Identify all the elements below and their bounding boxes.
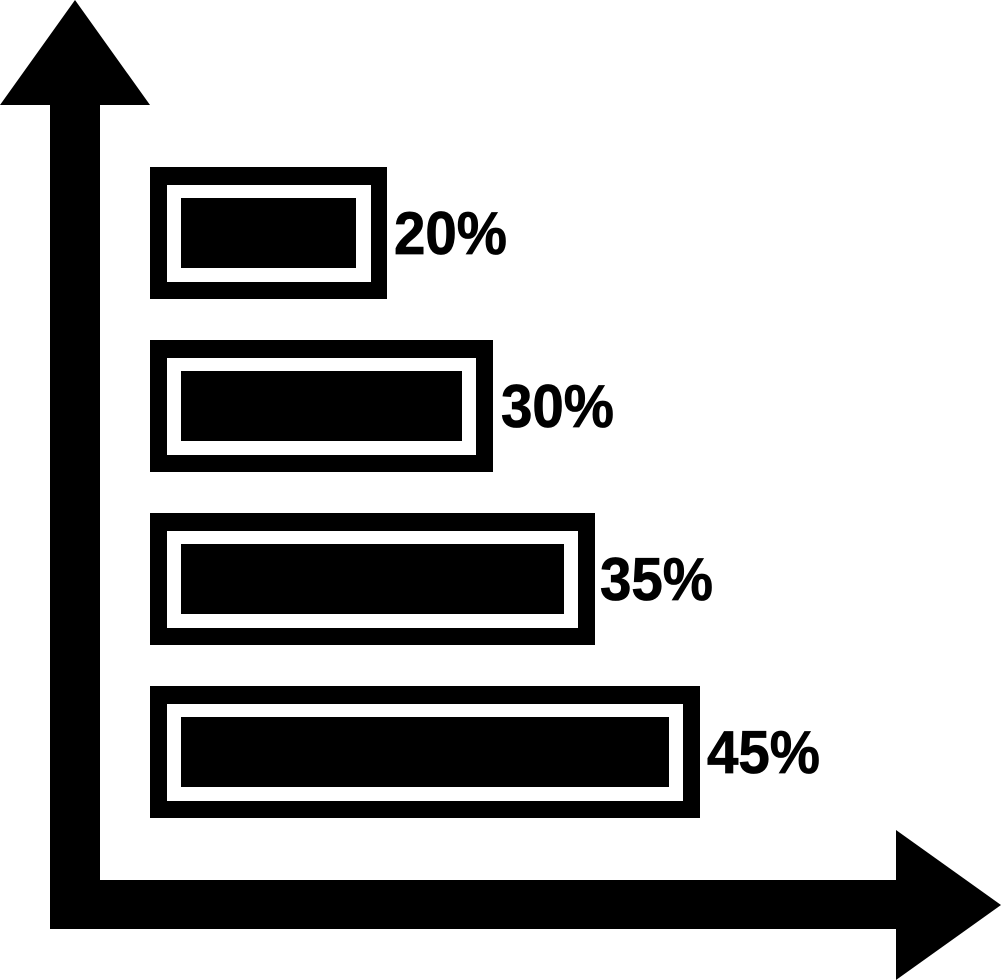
bar: 45%: [150, 686, 700, 818]
arrow: horizontal axis: [50, 830, 1001, 980]
label: 35%: 35%: [600, 546, 713, 613]
label: 20%: 20%: [394, 200, 507, 267]
bar: 35%: [150, 513, 595, 645]
bar: 20%: [150, 167, 387, 299]
label: 30%: 30%: [501, 373, 614, 440]
label: 45%: 45%: [707, 719, 820, 786]
bar: 30%: [150, 340, 493, 472]
arrow: vertical axis: [0, 0, 150, 880]
